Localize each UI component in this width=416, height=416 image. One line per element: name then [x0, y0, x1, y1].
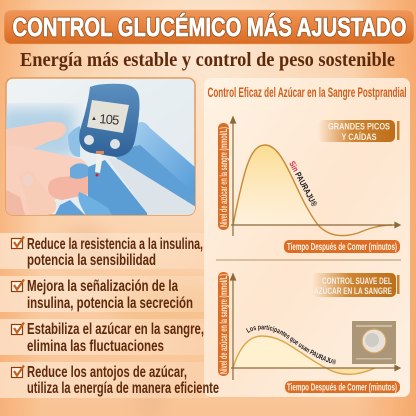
- curve label: participants: Los participantes que usan PAURAJU®: [246, 325, 336, 364]
- panel: postprandial charts: [204, 78, 410, 397]
- item 3: [0, 319, 204, 355]
- axes: [230, 274, 400, 380]
- text 3: Estabiliza el azúcar en la sangre,: [27, 321, 204, 338]
- chart: without product: [218, 117, 400, 253]
- curve area fill: [234, 336, 326, 368]
- icon: glucose meter: [79, 84, 140, 176]
- text 3: elimina las fluctuaciones: [27, 338, 164, 355]
- y axis label: Nivel de azúcar en la sangre (mmol/L): [219, 127, 230, 227]
- tag: big peaks: Y CAÍDAS: [342, 132, 376, 143]
- trough fill: [326, 368, 374, 374]
- photo: blood glucose meter test: [0, 78, 196, 215]
- icon: blue gloved hand: [55, 122, 196, 215]
- axes: [230, 117, 400, 236]
- curve area fill: [234, 145, 318, 225]
- curve label: without PAURAJU: Sin PAURAJU®: [287, 159, 320, 209]
- icon: patient hand with fingers: [6, 122, 88, 215]
- text 4, second line: utiliza la energía de manera eficiente: [27, 380, 219, 397]
- text 2: Mejora la señalización de la: [27, 278, 178, 295]
- icon: check 3: [12, 322, 24, 334]
- chart: with product: [218, 272, 402, 394]
- blood sugar curve: [233, 145, 392, 236]
- item 2: [0, 276, 204, 312]
- item 4: [0, 362, 208, 398]
- icon: check 2: [12, 280, 24, 292]
- divider: [216, 259, 401, 261]
- panel: benefits checklist: [0, 233, 208, 398]
- text 1: potencia la sensibilidad: [27, 252, 156, 269]
- icon: glucose meter: ▲: [91, 116, 97, 122]
- tag: gentle control: [312, 273, 400, 297]
- icon: check 1: [12, 236, 24, 248]
- icon: check 4: [12, 366, 24, 378]
- product package: [352, 321, 396, 364]
- y axis label: Nivel de azúcar en la sangre (mmol/L): [219, 274, 230, 374]
- y axis label: [218, 123, 230, 230]
- icon: glucose meter: 105: [99, 111, 120, 128]
- item 1: [0, 233, 204, 269]
- tag: big peaks: [318, 120, 400, 143]
- text 1: Reduce la resistencia a la insulina,: [27, 236, 203, 253]
- blood sugar curve: [233, 336, 375, 374]
- text 2: insulina, potencia la secreción: [27, 295, 193, 312]
- y axis label: [218, 272, 230, 376]
- tag: big peaks: GRANDES PICOS: [328, 122, 390, 132]
- subtitle: Energía más estable y control de peso sostenible: [20, 49, 395, 71]
- text 4: Reduce los antojos de azúcar,: [27, 364, 187, 381]
